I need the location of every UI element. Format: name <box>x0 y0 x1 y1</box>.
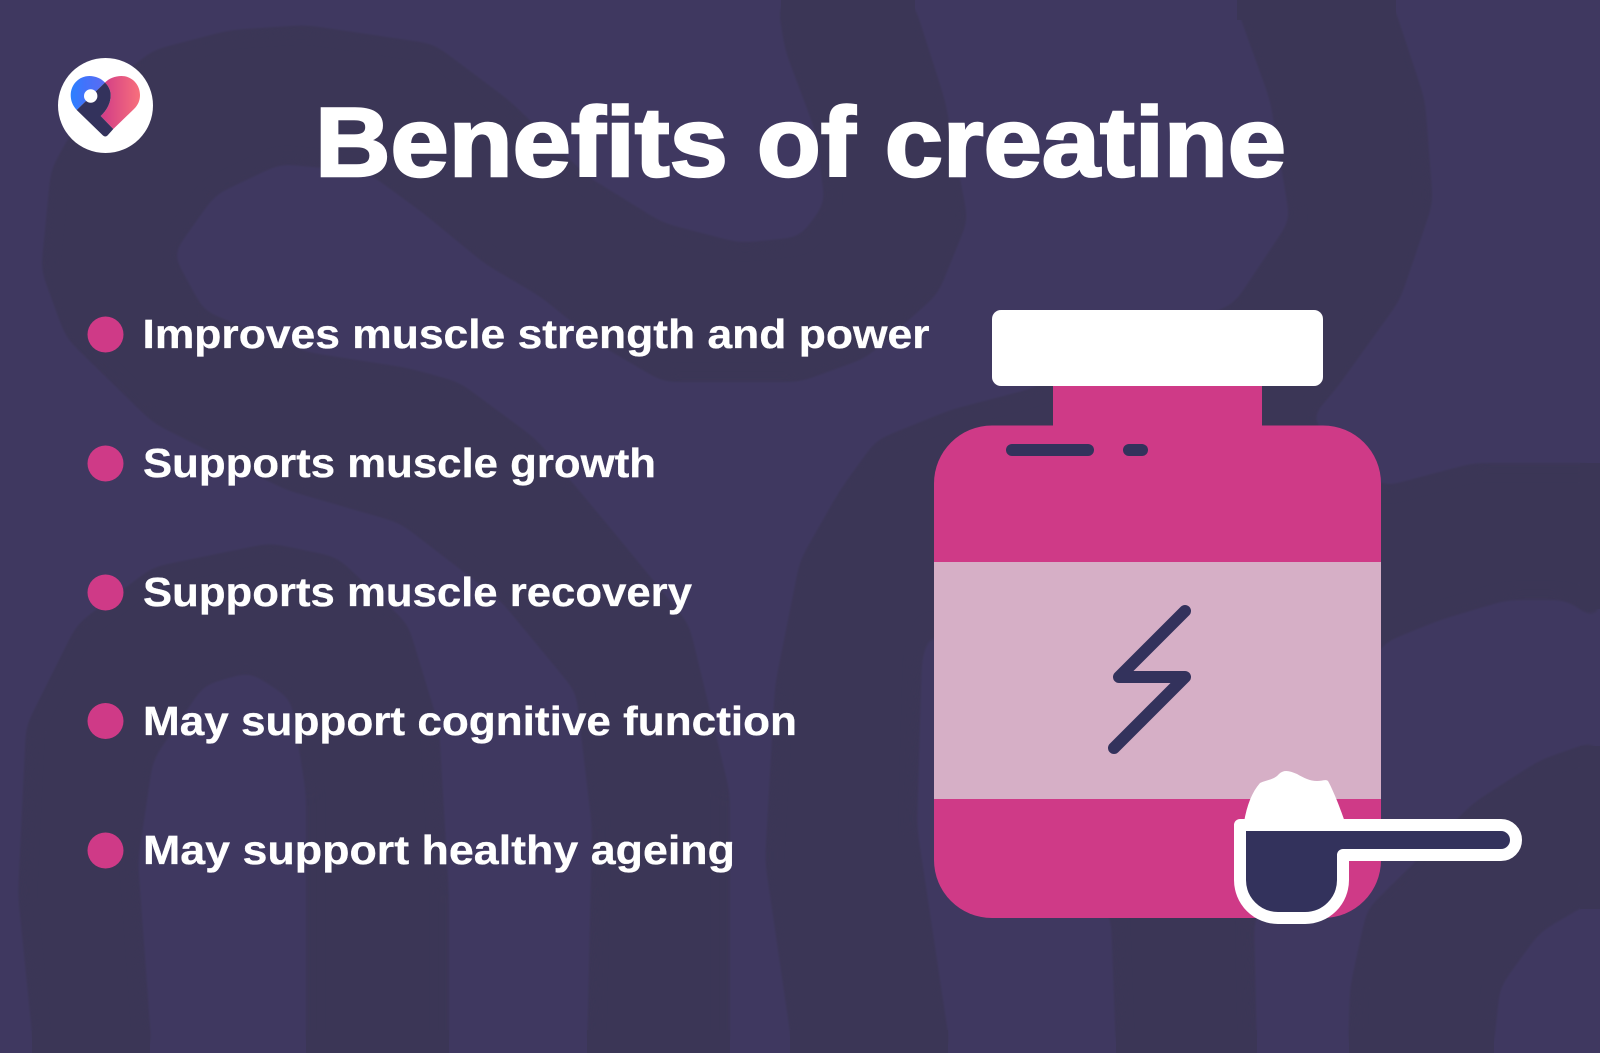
icon: scoop of powder <box>1240 771 1516 918</box>
jar neck <box>1053 384 1262 428</box>
list item: muscle strength: Improves muscle strength and power <box>142 311 930 357</box>
list item: muscle growth: Supports muscle growth <box>143 440 656 486</box>
icon: lightning bolt <box>1114 611 1185 748</box>
list item: healthy ageing: May support healthy ageing <box>143 827 735 873</box>
jar highlight marks <box>1006 444 1148 456</box>
title: Benefits of creatine <box>315 87 1286 197</box>
supplement jar illustration <box>934 310 1381 918</box>
list item: muscle recovery: Supports muscle recovery <box>143 569 692 615</box>
benefits list <box>88 311 930 873</box>
jar body <box>934 426 1381 918</box>
logo: heart pin badge <box>58 58 153 153</box>
jar label band <box>934 562 1381 799</box>
list item: cognitive function: May support cognitive function <box>143 698 797 744</box>
jar lid <box>992 310 1323 386</box>
